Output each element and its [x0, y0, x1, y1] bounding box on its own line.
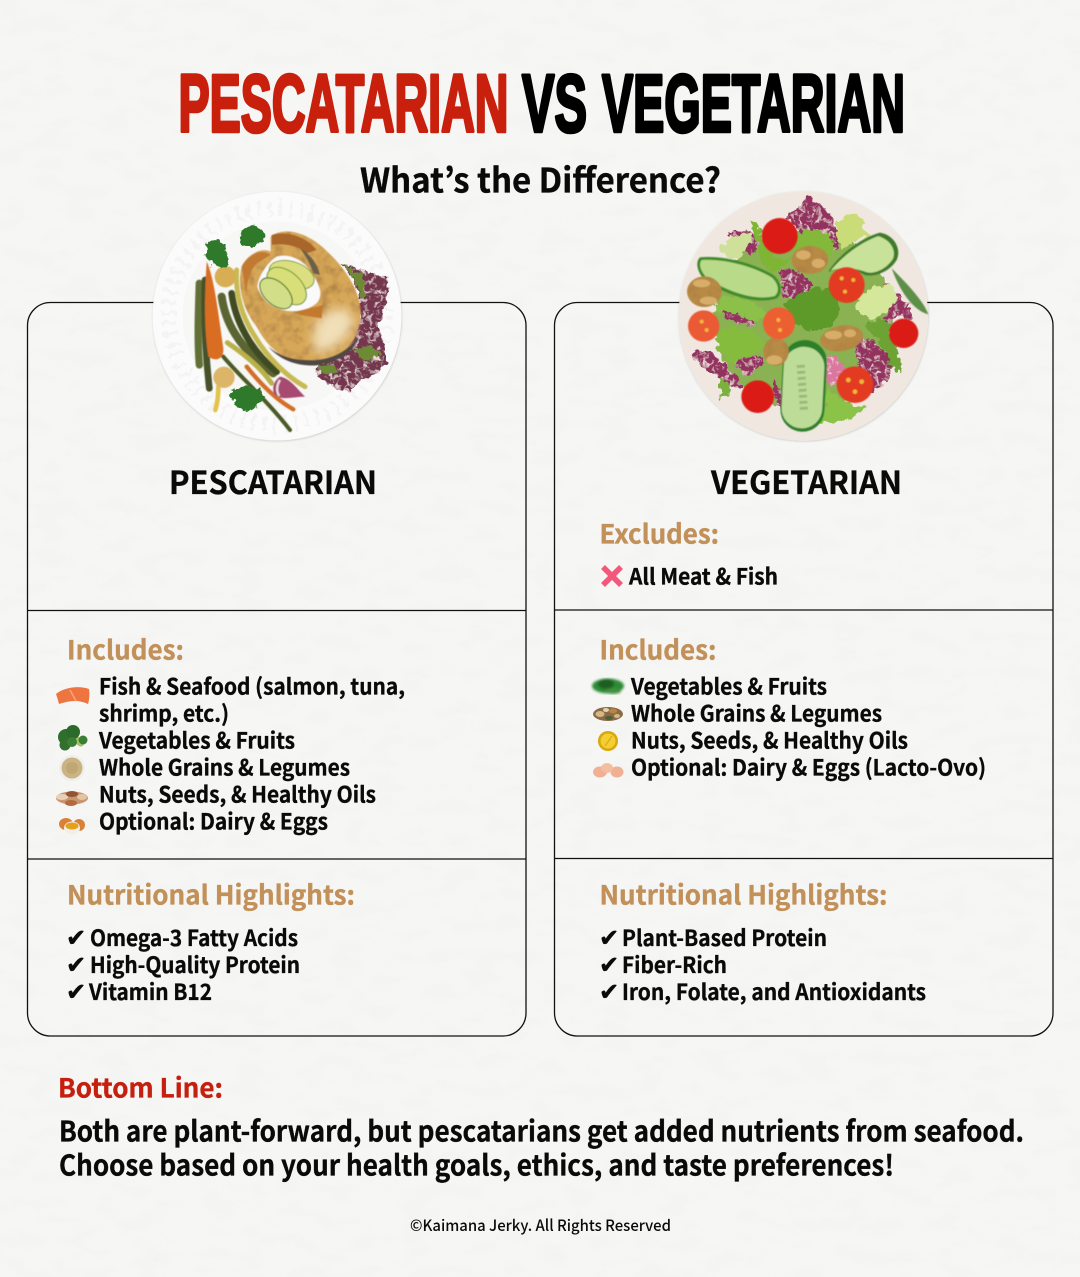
- list: pescatarian includes: [98, 670, 405, 836]
- carrot: [205, 262, 223, 359]
- footer: ©Kaimana Jerky. All Rights Reserved: [410, 1214, 671, 1236]
- icon: salad plate: [679, 191, 928, 441]
- list: vegetarian highlights: Fiber-Rich: [622, 948, 727, 980]
- list: vegetarian highlights: ✔: [599, 951, 619, 979]
- list: pescatarian highlights: ✔: [66, 951, 86, 979]
- list: vegetarian highlights: Iron, Folate, and Antioxidants: [622, 975, 926, 1007]
- text: bottom line summary: Choose based on your health goals, ethics, and taste preferences!: [59, 1144, 894, 1184]
- list: vegetarian includes: Vegetables & Fruits: [630, 670, 827, 702]
- heading: vegetarian: VEGETARIAN: [710, 458, 902, 504]
- list: vegetarian highlights: ✔: [599, 978, 619, 1006]
- heading: nutritional highlights pescatarian: Nutritional Highlights:: [67, 874, 355, 912]
- list: pescatarian highlights: High-Quality Protein: [90, 948, 300, 980]
- list: pescatarian includes: Fish & Seafood (salmon, tuna,: [99, 670, 405, 702]
- list: vegetarian includes: Optional: Dairy & Eggs (Lacto-Ovo): [631, 750, 986, 782]
- walnuts: [687, 246, 865, 366]
- lime slices: [265, 255, 318, 295]
- list: vegetarian includes: [630, 670, 986, 782]
- icon: eggs: [59, 818, 85, 834]
- list: pescatarian highlights: Omega-3 Fatty Acids: [90, 921, 298, 953]
- list: pescatarian includes: Nuts, Seeds, & Healthy Oils: [99, 778, 376, 810]
- tomatoes: [741, 218, 918, 413]
- icon: oil: [598, 731, 618, 751]
- list: vegetarian highlights: ✔: [599, 924, 619, 952]
- icon: broccoli: [58, 725, 88, 750]
- icon: fish plate: [153, 192, 401, 440]
- panel: vegetarian: [554, 191, 1053, 1036]
- list: pescatarian highlights: [66, 921, 300, 1007]
- heading: includes: Includes:: [67, 628, 184, 668]
- heading: nutritional highlights vegetarian: Nutritional Highlights:: [600, 874, 888, 912]
- list: pescatarian includes: shrimp, etc.): [99, 696, 229, 728]
- heading: includes: Includes:: [600, 628, 716, 668]
- icon: grains: [59, 755, 85, 781]
- title: PESCATARIAN: [178, 58, 508, 150]
- lettuce: [315, 263, 389, 391]
- icon: eggs: [593, 763, 624, 778]
- list: vegetarian highlights: Plant-Based Protein: [622, 921, 827, 953]
- garlic and onion: [215, 266, 236, 287]
- list: vegetarian includes: Nuts, Seeds, & Healthy Oils: [631, 724, 908, 756]
- fish steak: [240, 231, 361, 364]
- list: vegetarian includes: Whole Grains & Legumes: [631, 696, 882, 728]
- heading: excludes: Excludes:: [600, 512, 719, 552]
- icon: spinach: [592, 678, 624, 694]
- list: pescatarian highlights: ✔: [66, 924, 86, 952]
- list: pescatarian highlights: Vitamin B12: [88, 975, 212, 1007]
- icon: salmon: [56, 687, 89, 704]
- icon: nuts: [56, 791, 88, 806]
- parsley: [205, 226, 265, 411]
- title: VS: [522, 58, 587, 150]
- lettuce base: [690, 197, 912, 423]
- text: all meat and fish: All Meat & Fish: [628, 560, 778, 592]
- vegetables: [198, 270, 305, 430]
- list: vegetarian highlights: [599, 921, 926, 1007]
- icon: legumes: [593, 707, 623, 721]
- list: pescatarian includes: Vegetables & Fruits: [98, 724, 295, 756]
- heading: pescatarian: PESCATARIAN: [169, 458, 377, 504]
- cucumbers: [697, 233, 898, 433]
- list: pescatarian includes: Optional: Dairy & Eggs: [99, 804, 328, 836]
- list: pescatarian highlights: ✔: [66, 978, 86, 1006]
- heading: bottom line: Bottom Line:: [58, 1066, 223, 1106]
- list: pescatarian includes: Whole Grains & Legumes: [99, 750, 350, 782]
- icon: cross: [603, 567, 621, 585]
- subtitle: What’s the Difference?: [360, 154, 721, 202]
- panel: pescatarian: [27, 192, 526, 1036]
- text: bottom line summary: [59, 1110, 1024, 1184]
